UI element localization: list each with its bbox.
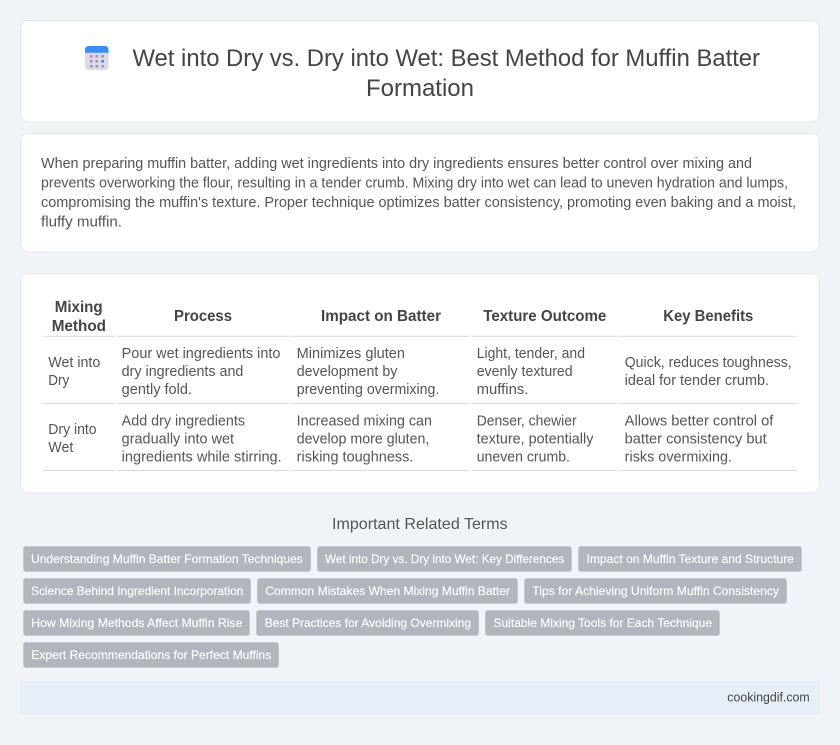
intro paragraph: compromising the muffin's texture. Proper technique optimizes batter consistency, promoting even baking and a moist,: [41, 195, 796, 211]
tag: [486, 610, 720, 636]
tag: Best Practices for Avoiding Overmixing: [265, 616, 471, 630]
panel: title header: [20, 20, 820, 122]
table row: wet into dry: Wet into: [48, 355, 100, 371]
panel: introduction: [20, 134, 820, 252]
intro paragraph: prevents overworking the flour, resulting in a tender crumb. Mixing dry into wet can lead to uneven hydration and lumps,: [41, 176, 788, 192]
table row: wet into dry: gently fold.: [122, 382, 192, 398]
tag: [24, 610, 250, 636]
tag: [24, 546, 310, 572]
table row: dry into wet: Wet: [48, 440, 73, 456]
table row: dry into wet: [48, 413, 773, 465]
tag: How Mixing Methods Affect Muffin Rise: [31, 616, 243, 630]
table row: wet into dry: Pour wet ingredients into: [122, 346, 280, 362]
table row: wet into dry: Minimizes gluten: [297, 346, 405, 362]
table row: wet into dry: Dry: [48, 373, 70, 389]
tag: [578, 546, 802, 572]
table row: dry into wet: Allows better control of: [625, 413, 773, 429]
table row: wet into dry: evenly textured: [477, 364, 573, 380]
tag: [24, 642, 278, 668]
panel: comparison table: [20, 274, 820, 493]
table row: wet into dry: ideal for tender crumb.: [625, 373, 769, 389]
table row: dry into wet: risks overmixing.: [625, 449, 732, 465]
table row: dry into wet: ingredients while stirring.: [122, 449, 282, 465]
related term tags: [24, 546, 802, 668]
table header row: Key Benefits: [663, 308, 753, 325]
intro paragraph: When preparing muffin batter, adding wet ingredients into dry ingredients ensures better control over mixing and: [41, 156, 752, 172]
table row: dry into wet: uneven crumb.: [477, 449, 570, 465]
icon: calendar: [85, 46, 108, 70]
table header row: Texture Outcome: [483, 308, 606, 325]
title: Formation: [366, 75, 474, 102]
tag: Tips for Achieving Uniform Muffin Consistency: [532, 584, 779, 598]
table header row: Mixing: [55, 299, 103, 316]
tag: [24, 578, 250, 604]
table row: wet into dry: muffins.: [477, 382, 528, 398]
table row: dry into wet: gradually into wet: [122, 431, 234, 447]
tag: [256, 610, 478, 636]
table header row: Impact on Batter: [321, 308, 441, 325]
table row: dry into wet: Increased mixing can: [297, 413, 432, 429]
tag: Understanding Muffin Batter Formation Techniques: [31, 552, 303, 566]
intro paragraph: [41, 156, 796, 230]
table header row: Process: [174, 308, 232, 325]
table row: wet into dry: dry ingredients and: [122, 364, 243, 380]
table row: dry into wet: texture, potentially: [477, 431, 594, 447]
table row: dry into wet: batter consistency but: [625, 431, 767, 447]
footer bar: [20, 681, 820, 715]
title: Wet into Dry vs. Dry into Wet: Best Method for Muffin Batter: [132, 45, 760, 72]
table row: dry into wet: develop more gluten,: [297, 431, 429, 447]
title: [132, 45, 760, 102]
table row: dry into wet: Add dry ingredients: [122, 413, 245, 429]
tag: Wet into Dry vs. Dry into Wet: Key Differences: [325, 552, 564, 566]
table row: dry into wet: risking toughness.: [297, 449, 413, 465]
table row: wet into dry: Light, tender, and: [477, 346, 585, 362]
table row: dry into wet: Denser, chewier: [477, 413, 577, 429]
heading: important related terms: Important Related Terms: [332, 516, 508, 533]
tag: [524, 578, 786, 604]
table row: wet into dry: [48, 346, 792, 398]
footer bar: cookingdif.com: [727, 690, 810, 705]
tag: Common Mistakes When Mixing Muffin Batter: [265, 584, 510, 598]
tag: Expert Recommendations for Perfect Muffins: [31, 648, 271, 662]
table row: dry into wet: Dry into: [48, 422, 97, 438]
tag: [258, 578, 518, 604]
table row: wet into dry: development by: [297, 364, 398, 380]
tag: Science Behind Ingredient Incorporation: [31, 584, 243, 598]
table header row: Method: [52, 318, 106, 335]
tag: Impact on Muffin Texture and Structure: [586, 552, 794, 566]
table header row: [52, 299, 753, 335]
tag: [318, 546, 572, 572]
table row: wet into dry: preventing overmixing.: [297, 382, 439, 398]
tag: Suitable Mixing Tools for Each Technique: [494, 616, 712, 630]
intro paragraph: fluffy muffin.: [41, 214, 122, 230]
table row: wet into dry: Quick, reduces toughness,: [625, 355, 792, 371]
